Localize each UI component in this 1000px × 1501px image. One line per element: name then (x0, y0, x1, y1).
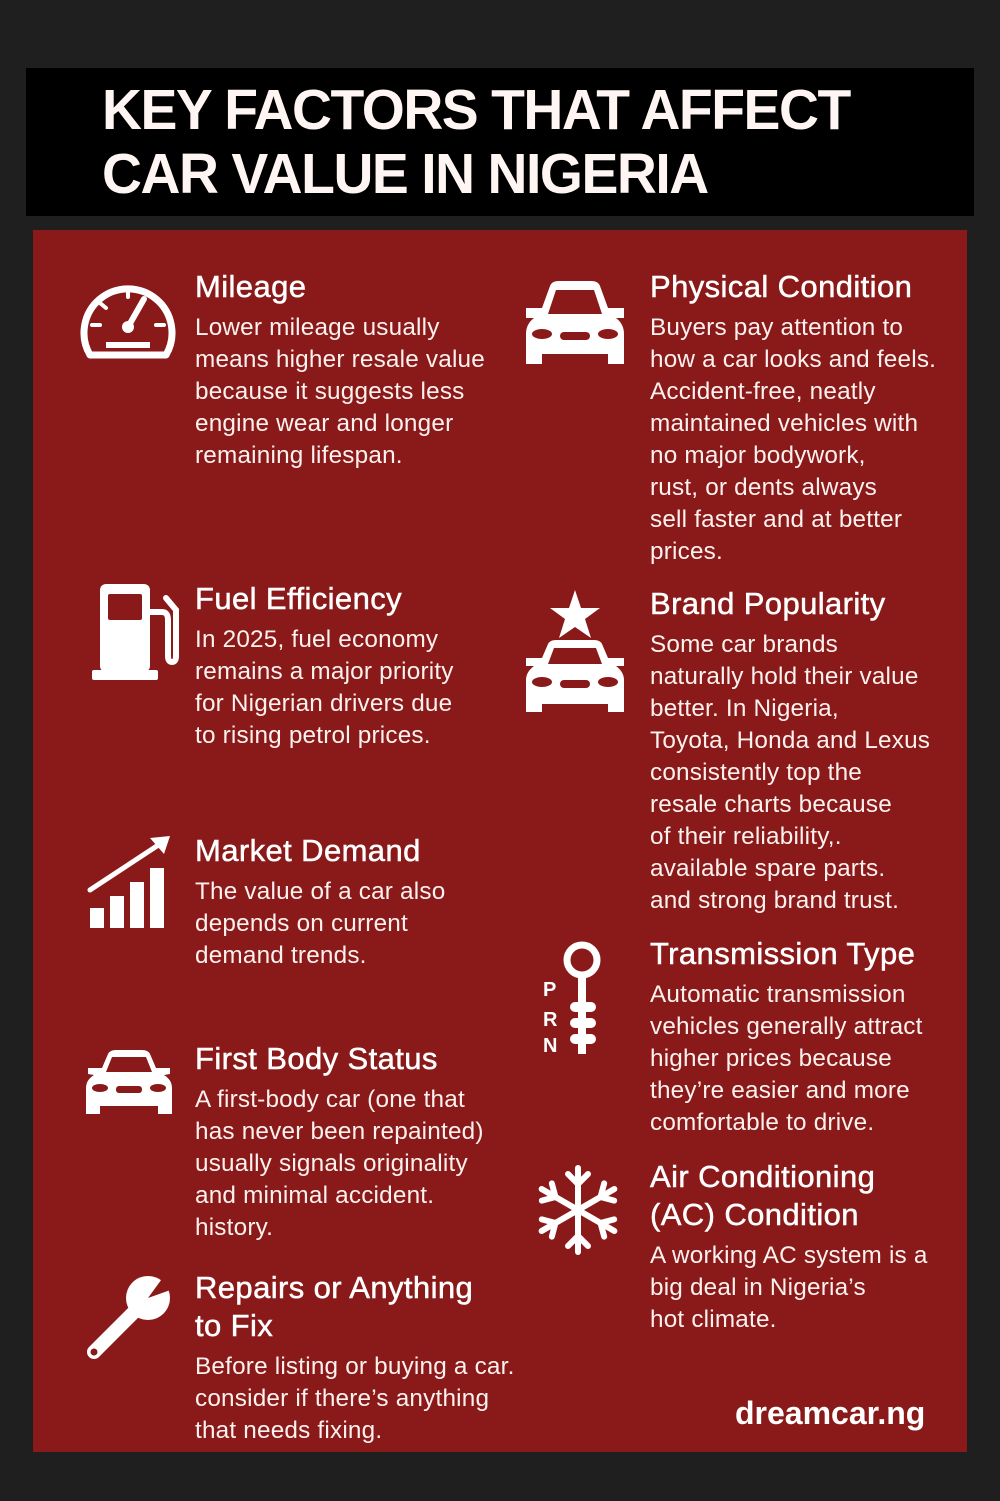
item: repairs: that needs fixing. (195, 1417, 382, 1444)
item: transmission type: Automatic transmission (650, 981, 906, 1008)
item: market demand: The value of a car also (195, 878, 445, 905)
icon: car front (526, 281, 624, 364)
item: physical condition (650, 269, 936, 565)
title: CAR VALUE IN NIGERIA (102, 142, 708, 206)
item: fuel efficiency: to rising petrol prices. (195, 722, 431, 749)
title: KEY FACTORS THAT AFFECT (102, 78, 850, 142)
item: mileage (195, 269, 485, 469)
item: air conditioning: Air Conditioning (650, 1159, 875, 1194)
brand footer: dreamcar.ng (735, 1395, 925, 1431)
icon: car side (86, 1050, 172, 1114)
item: first body status: First Body Status (195, 1041, 438, 1076)
item: brand popularity: of their reliability,. (650, 823, 842, 850)
item: transmission type: Transmission Type (650, 936, 915, 971)
icon: fuel pump (92, 584, 179, 680)
item: first body status (195, 1041, 484, 1241)
item: air conditioning: A working AC system is a (650, 1242, 928, 1269)
item: market demand: demand trends. (195, 942, 367, 969)
item: physical condition: sell faster and at better (650, 506, 902, 533)
item: physical condition: Buyers pay attention to (650, 314, 903, 341)
icon: car with star (526, 590, 624, 712)
panel: factors (33, 230, 967, 1452)
item: first body status: history. (195, 1214, 273, 1241)
item: repairs: consider if there’s anything (195, 1385, 489, 1412)
item: brand popularity: consistently top the (650, 759, 862, 786)
item: brand popularity: Some car brands (650, 631, 838, 658)
item: brand popularity (650, 586, 930, 914)
item: mileage: means higher resale value (195, 346, 485, 373)
item: first body status: usually signals originality (195, 1150, 468, 1177)
item: brand popularity: naturally hold their value (650, 663, 919, 690)
item: transmission type: higher prices because (650, 1045, 892, 1072)
item: brand popularity: better. In Nigeria, (650, 695, 839, 722)
icon: wrench (87, 1276, 170, 1359)
item: physical condition: Physical Condition (650, 269, 912, 304)
item: air conditioning: hot climate. (650, 1306, 777, 1333)
item: first body status: and minimal accident. (195, 1182, 434, 1209)
item: brand popularity: available spare parts. (650, 855, 885, 882)
item: physical condition: Accident-free, neatly (650, 378, 876, 405)
item: repairs: Before listing or buying a car. (195, 1353, 515, 1380)
item: fuel efficiency: In 2025, fuel economy (195, 626, 438, 653)
item: mileage: Lower mileage usually (195, 314, 440, 341)
icon: gear shifter: N (543, 1035, 557, 1057)
item: first body status: A first-body car (one that (195, 1086, 465, 1113)
item: transmission type: vehicles generally attract (650, 1013, 923, 1040)
item: market demand (195, 833, 445, 969)
item: market demand: depends on current (195, 910, 408, 937)
icon: gear shifter (543, 942, 600, 1057)
item: mileage: because it suggests less (195, 378, 465, 405)
icon: gear shifter: P (543, 979, 556, 1001)
item: fuel efficiency: remains a major priority (195, 658, 454, 685)
item: brand popularity: Brand Popularity (650, 586, 886, 621)
item: market demand: Market Demand (195, 833, 421, 868)
item: physical condition: no major bodywork, (650, 442, 866, 469)
item: fuel efficiency (195, 581, 454, 749)
item: repairs: Repairs or Anything (195, 1270, 473, 1305)
item: fuel efficiency: for Nigerian drivers due (195, 690, 452, 717)
item: air conditioning (650, 1159, 928, 1333)
item: mileage: Mileage (195, 269, 306, 304)
item: brand popularity: resale charts because (650, 791, 892, 818)
item: physical condition: rust, or dents always (650, 474, 877, 501)
item: physical condition: prices. (650, 538, 723, 565)
item: fuel efficiency: Fuel Efficiency (195, 581, 402, 616)
item: physical condition: maintained vehicles with (650, 410, 918, 437)
item: transmission type: they’re easier and more (650, 1077, 910, 1104)
icon: growth chart (88, 836, 170, 928)
item: air conditioning: (AC) Condition (650, 1197, 859, 1232)
item: transmission type (650, 936, 923, 1136)
item: mileage: engine wear and longer (195, 410, 453, 437)
item: brand popularity: and strong brand trust. (650, 887, 899, 914)
item: transmission type: comfortable to drive. (650, 1109, 874, 1136)
icon: gear shifter: R (543, 1009, 558, 1031)
icon: speedometer (80, 285, 176, 358)
item: mileage: remaining lifespan. (195, 442, 403, 469)
title (26, 68, 974, 216)
item: air conditioning: big deal in Nigeria’s (650, 1274, 866, 1301)
icon: snowflake (538, 1165, 618, 1255)
item: repairs: to Fix (195, 1308, 273, 1343)
item: repairs (195, 1270, 515, 1444)
item: brand popularity: Toyota, Honda and Lexus (650, 727, 930, 754)
item: first body status: has never been repainted) (195, 1118, 484, 1145)
item: physical condition: how a car looks and feels. (650, 346, 936, 373)
